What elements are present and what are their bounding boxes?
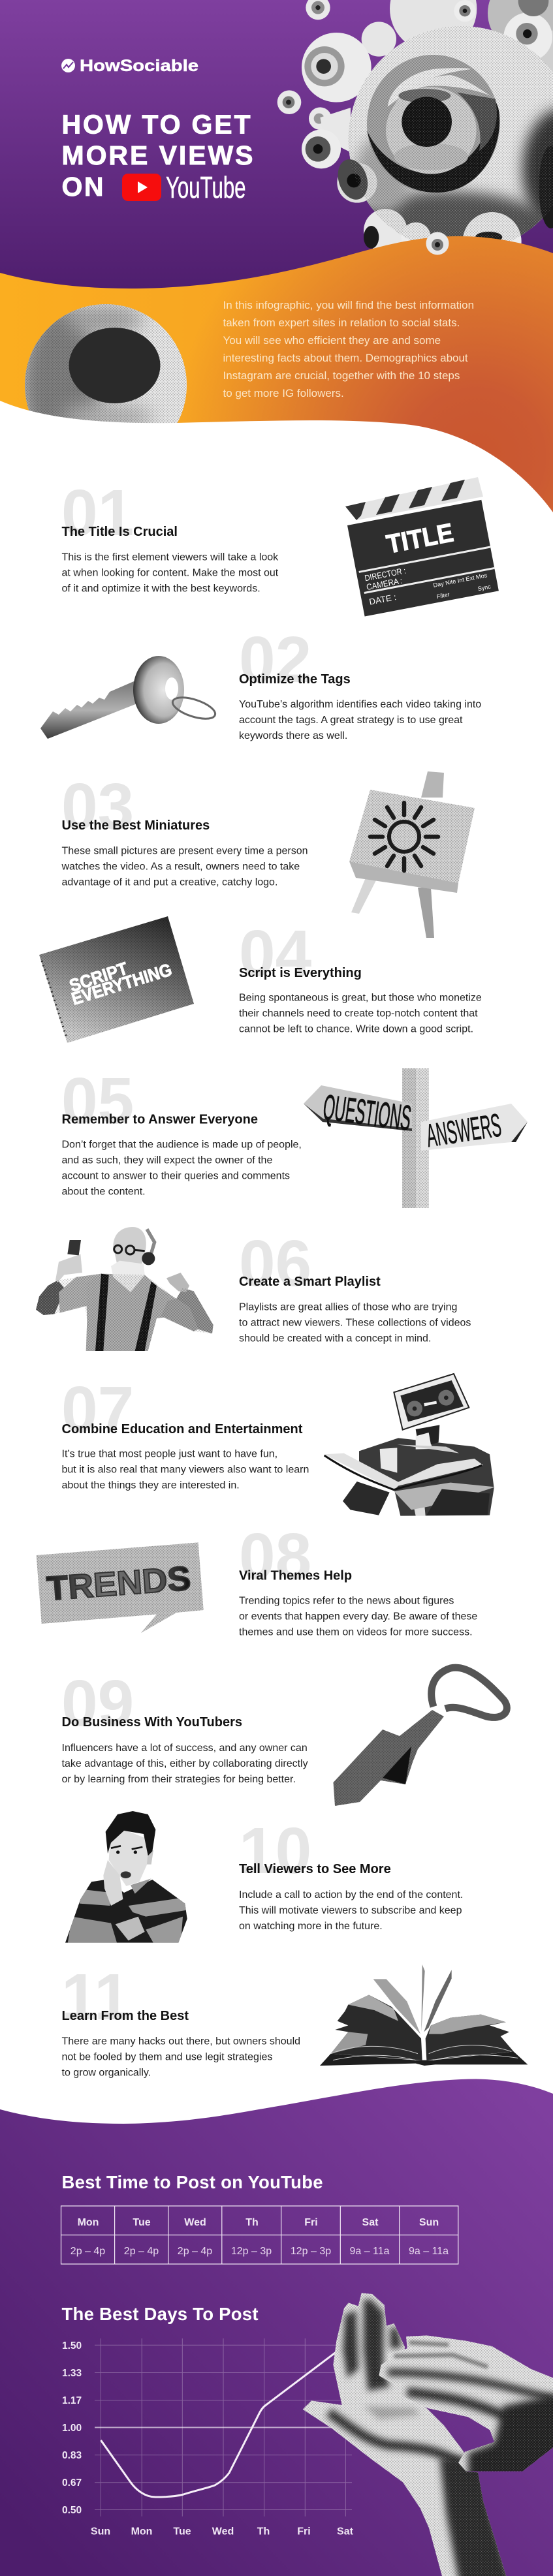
illustration: clapperboard: DATE : (368, 592, 397, 607)
step 11: 11 (61, 1961, 131, 2034)
illustration: cluster of eyeballs (277, 0, 553, 249)
step 2: 02 (239, 623, 311, 696)
line chart: best days to post (62, 2338, 354, 2537)
illustration: trends speech bubble: TRENDS (46, 1560, 192, 1608)
illustration: clapperboard: TITLE (385, 518, 456, 559)
illustration: easel with sun (349, 771, 475, 938)
step 2: account the tags. A great strategy is to use great (239, 715, 463, 726)
title: HOW TO GET (61, 110, 251, 140)
illustration: questions and answers signpost: QUESTIONS (321, 1087, 413, 1138)
step 3: 03 (61, 770, 134, 843)
step 10: 10 (239, 1814, 311, 1887)
table: best time to post: Mon (78, 2217, 99, 2228)
step 11: There are many hacks out there, but owners should (61, 2036, 300, 2047)
step 3: advantage of it and put a creative, catchy logo. (61, 877, 277, 888)
step 2: Optimize the Tags (239, 672, 351, 687)
table: best time to post: 12p – 3p (231, 2246, 272, 2257)
step 10: Include a call to action by the end of the content. (239, 1889, 463, 1901)
illustration: clapperboard: Filter (436, 591, 450, 600)
line chart: best days to post: 0.67 (62, 2477, 82, 2489)
step 2: keywords there as well. (239, 730, 347, 741)
line chart: best days to post: 1.17 (62, 2395, 82, 2406)
table: best time to post: 2p – 4p (178, 2246, 212, 2257)
table: best time to post: 12p – 3p (291, 2246, 331, 2257)
step 8: Trending topics refer to the news about figures (239, 1595, 454, 1607)
step 7: Combine Education and Entertainment (61, 1422, 303, 1436)
step 3 (61, 770, 308, 888)
table: best time to post: 2p – 4p (124, 2246, 159, 2257)
line chart: best days to post: Sat (337, 2526, 354, 2537)
table: best time to post: Tue (133, 2217, 151, 2228)
step 1: The Title Is Crucial (61, 525, 178, 539)
step 1: of it and optimize it with the best keywords. (61, 583, 261, 594)
line chart: best days to post: 1.00 (62, 2423, 82, 2434)
step 6: should be created with a concept in mind. (239, 1333, 431, 1344)
illustration: clapperboard: Day Nite Int Ext Mos (433, 572, 488, 589)
step 1 (61, 476, 279, 594)
illustration: script notebook (39, 916, 194, 1043)
step 1: This is the first element viewers will take a look (61, 552, 279, 563)
heading: best days to post: The Best Days To Post (61, 2304, 259, 2324)
illustration: clapperboard: Sync (477, 583, 492, 592)
illustration: script notebook: EVERYTHING (69, 960, 174, 1009)
title: MORE VIEWS (61, 140, 253, 170)
illustration: script notebook: SCRIPT (67, 959, 131, 996)
step 9: 09 (61, 1667, 134, 1740)
line chart: best days to post: 1.33 (62, 2368, 82, 2379)
step 5 (61, 1064, 302, 1197)
table: best time to post (61, 2206, 458, 2264)
line chart: best days to post: 0.50 (62, 2505, 82, 2516)
step 11: to grow organically. (61, 2068, 151, 2078)
step 5: Don’t forget that the audience is made up of people, (61, 1140, 302, 1150)
orange wave band (0, 236, 553, 522)
table: best time to post: Sat (362, 2217, 379, 2228)
table: best time to post: Sun (419, 2217, 439, 2228)
logo: HowSociable: HowSociable (80, 57, 198, 75)
intro text: You will see who efficient they are and some (223, 334, 441, 347)
step 3: These small pictures are present every time a person (61, 846, 308, 856)
step 2 (239, 623, 481, 741)
intro text: interesting facts about them. Demographics about (223, 352, 468, 364)
step 9: or by learning from their strategies for being better. (61, 1774, 296, 1785)
step 9: take advantage of this, either by collaborating directly (61, 1758, 308, 1769)
illustration: necktie (333, 1668, 507, 1806)
step 7 (61, 1373, 309, 1491)
step 4: cannot be left to chance. Write down a good script. (239, 1023, 473, 1035)
step 5: 05 (61, 1064, 134, 1138)
line chart: best days to post: 1.50 (62, 2340, 82, 2351)
step 5: account to answer to their queries and comments (61, 1171, 290, 1181)
illustration: clapperboard: DIRECTOR : (364, 566, 407, 583)
intro text: In this infographic, you will find the best information (223, 299, 474, 311)
step 9 (61, 1667, 308, 1785)
step 9: Do Business With YouTubers (61, 1715, 242, 1730)
header background (0, 0, 553, 300)
step 4: their channels need to create top-notch content that (239, 1008, 478, 1019)
step 11: not be fooled by them and use legit strategies (61, 2052, 272, 2062)
step 7: about the things they are interested in. (61, 1480, 240, 1491)
line chart: best days to post: Fri (297, 2526, 311, 2537)
icon: YouTube logo: YouTube (166, 170, 245, 204)
step 10: Tell Viewers to See More (239, 1862, 391, 1876)
title (61, 110, 253, 202)
table: best time to post: 9a – 11a (349, 2246, 390, 2257)
line chart: best days to post: Sun (91, 2526, 110, 2537)
illustration: questions and answers signpost (304, 1068, 528, 1208)
step 5: about the content. (61, 1187, 146, 1197)
line chart: best days to post: Tue (173, 2526, 191, 2537)
intro text: Instagram are crucial, together with the 10 steps (223, 369, 460, 382)
step 7: It’s true that most people just want to have fun, (61, 1449, 277, 1459)
white content background (0, 401, 553, 2154)
step 11 (61, 1961, 300, 2078)
table: best time to post: 2p – 4p (71, 2246, 105, 2257)
step 6: Playlists are great allies of those who are trying (239, 1301, 457, 1313)
step 1: 01 (61, 476, 134, 550)
step 1: at when looking for content. Make the most out (61, 568, 279, 578)
intro text: to get more IG followers. (223, 387, 344, 399)
table: best time to post: Wed (184, 2217, 206, 2228)
step 10: on watching more in the future. (239, 1921, 383, 1932)
step 10 (239, 1814, 463, 1932)
step 8: themes and use them on videos for more success. (239, 1626, 473, 1638)
step 3: Use the Best Miniatures (61, 818, 210, 833)
step 8: 08 (239, 1520, 311, 1593)
illustration: open book (320, 1964, 528, 2066)
step 7: 07 (61, 1373, 134, 1446)
icon: small eyeball on wave (426, 232, 449, 255)
illustration: robot reading a book (324, 1374, 495, 1516)
step 10: This will motivate viewers to subscribe and keep (239, 1905, 462, 1916)
step 6: to attract new viewers. These collections of videos (239, 1317, 471, 1329)
illustration: clapperboard (345, 477, 499, 616)
line chart: best days to post: Th (257, 2526, 270, 2537)
table: best time to post: 9a – 11a (409, 2246, 449, 2257)
step 5: Remember to Answer Everyone (61, 1112, 258, 1126)
illustration: halftone hands (292, 2284, 553, 2576)
step 3: watches the video. As a result, owners need to take (61, 861, 300, 872)
icon: YouTube logo (122, 170, 245, 204)
illustration: key (40, 656, 217, 739)
illustration: trends speech bubble (37, 1542, 204, 1633)
step 8: or events that happen every day. Be aware of these (239, 1611, 477, 1622)
step 7: but it is also real that many viewers also want to learn (61, 1465, 309, 1475)
step 2: YouTube’s algorithm identifies each video taking into (239, 699, 481, 710)
illustration: surprised young man (65, 1811, 187, 1945)
step 4: Being spontaneous is great, but those who monetize (239, 992, 482, 1004)
step 8: Viral Themes Help (239, 1569, 352, 1583)
heading: best time to post: Best Time to Post on YouTube (61, 2172, 323, 2192)
step 4: 04 (239, 917, 312, 990)
step 6 (239, 1227, 471, 1344)
step 11: Learn From the Best (61, 2009, 189, 2023)
intro text: taken from expert sites in relation to social stats. (223, 317, 460, 329)
illustration: clapperboard: CAMERA : (366, 576, 403, 592)
step 9: Influencers have a lot of success, and any owner can (61, 1743, 308, 1754)
step 4 (239, 917, 482, 1035)
illustration: large eyeball (25, 304, 187, 423)
line chart: best days to post: Mon (131, 2526, 152, 2537)
step 6: Create a Smart Playlist (239, 1275, 381, 1289)
footer purple wave (0, 2079, 553, 2576)
step 8 (239, 1520, 477, 1638)
step 6: 06 (239, 1227, 311, 1300)
illustration: bearded man with phone and headphones (36, 1227, 213, 1351)
table: best time to post: Th (245, 2217, 259, 2228)
table: best time to post: Fri (304, 2217, 318, 2228)
line chart: best days to post: 0.83 (62, 2450, 82, 2461)
step 5: and as such, they will expect the owner of the (61, 1155, 272, 1166)
title: ON (61, 172, 103, 202)
step 4: Script is Everything (239, 966, 362, 980)
line chart: best days to post: Wed (212, 2526, 234, 2537)
